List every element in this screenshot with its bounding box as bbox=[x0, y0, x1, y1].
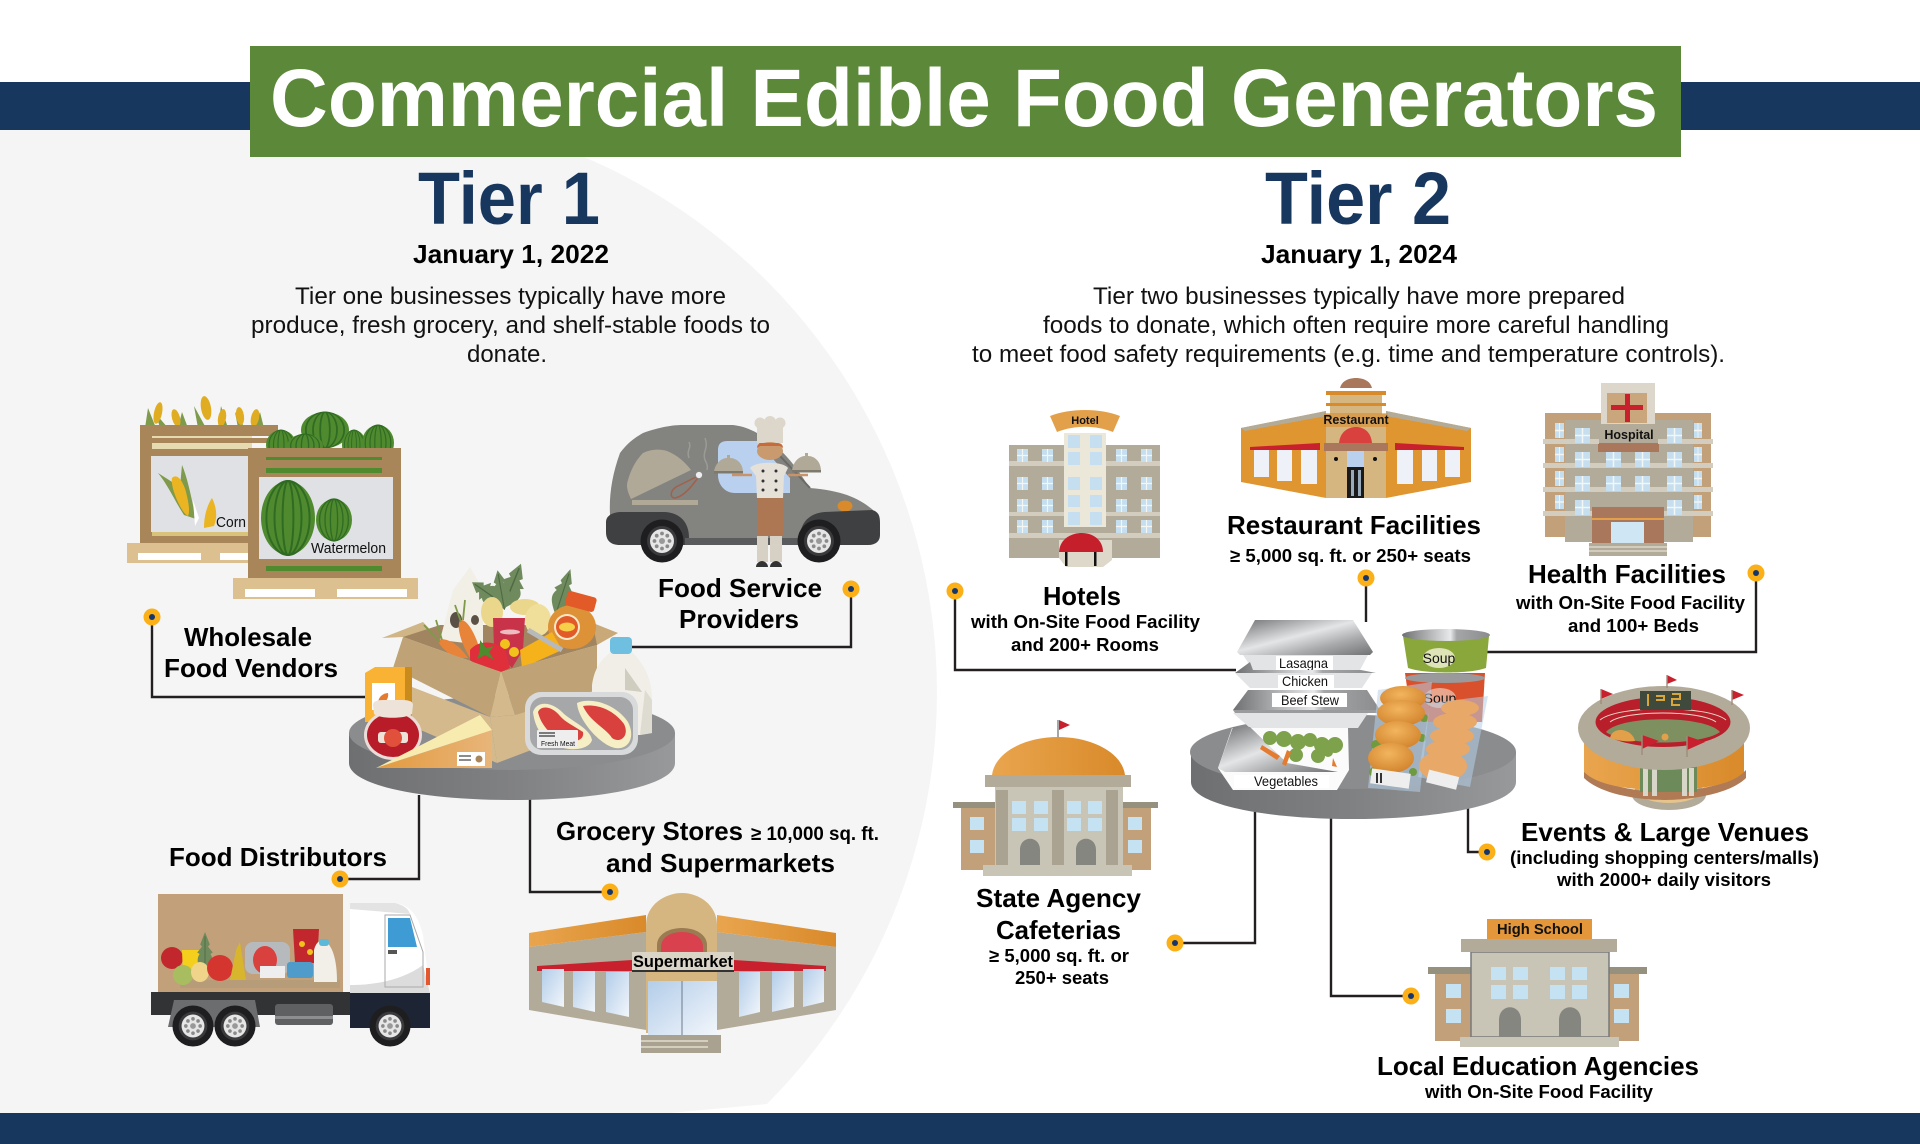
label: state agency cafeterias: Cafeterias bbox=[996, 915, 1121, 945]
icon: supermarket building: Supermarket bbox=[633, 952, 733, 971]
connector lines tier 2 bbox=[955, 573, 1756, 996]
icon: wholesale crates of corn and watermelon bbox=[127, 395, 418, 599]
icon: food service van with chef bbox=[606, 416, 880, 567]
stacked clamshell containers: Vegetables bbox=[1254, 773, 1318, 789]
icon: wholesale crates of corn and watermelon: Watermelon bbox=[311, 541, 386, 557]
label: local education agencies bbox=[1377, 1051, 1699, 1102]
tier 2 description: to meet food safety requirements (e.g. time and temperature controls). bbox=[972, 341, 1725, 368]
icon: hospital: Hospital bbox=[1604, 428, 1654, 442]
tier 2 description bbox=[972, 283, 1725, 368]
label: grocery stores and supermarkets: Grocery Stores bbox=[556, 816, 743, 846]
burgers bbox=[1368, 682, 1432, 792]
title banner: Commercial Edible Food Generators bbox=[270, 53, 1658, 144]
icon: hotel: Hotel bbox=[1071, 415, 1099, 427]
label: health facilities bbox=[1515, 559, 1746, 636]
label: grocery stores and supermarkets: and Supermarkets bbox=[606, 848, 835, 878]
tier 1 description: donate. bbox=[467, 341, 547, 368]
label: events and large venues: Events & Large Venues bbox=[1521, 817, 1809, 847]
stacked clamshell containers: Lasagna bbox=[1279, 655, 1328, 671]
stacked clamshell containers bbox=[1218, 620, 1380, 790]
tier 2 date: January 1, 2024 bbox=[1261, 239, 1458, 269]
tier 1 date: January 1, 2022 bbox=[413, 239, 609, 269]
label: state agency cafeterias bbox=[976, 883, 1142, 988]
label: food service providers: Providers bbox=[679, 604, 799, 634]
bottom navy band bbox=[0, 1113, 1920, 1144]
label: wholesale food vendors bbox=[164, 622, 338, 683]
label: restaurant facilities: Restaurant Facilities bbox=[1227, 510, 1481, 540]
icon: wholesale crates of corn and watermelon: Corn bbox=[216, 515, 246, 531]
soup cups bbox=[1402, 629, 1490, 722]
icon: restaurant bbox=[1241, 378, 1471, 498]
icon: food distributor truck bbox=[151, 894, 430, 1047]
soup cups: Soup bbox=[1423, 650, 1456, 666]
label: hotels bbox=[970, 581, 1201, 655]
label: food distributors: Food Distributors bbox=[169, 842, 387, 872]
label: hotels: Hotels bbox=[1043, 581, 1121, 611]
label: health facilities: Health Facilities bbox=[1528, 559, 1726, 589]
icon: stadium bbox=[1578, 675, 1750, 810]
icon: tier 1 grey platform with food box bbox=[349, 559, 675, 800]
label: local education agencies: with On-Site Food Facility bbox=[1424, 1081, 1654, 1102]
heading: tier 1: Tier 1 bbox=[418, 157, 600, 240]
label: food service providers bbox=[658, 573, 822, 634]
icon: high school building: High School bbox=[1497, 921, 1583, 938]
label: grocery stores and supermarkets bbox=[556, 816, 879, 878]
meat tray: Fresh Meat bbox=[541, 739, 576, 748]
orange juice carton bbox=[365, 667, 412, 722]
label: hotels: with On-Site Food Facility bbox=[970, 611, 1201, 632]
tier 1 description: produce, fresh grocery, and shelf-stable foods to bbox=[251, 312, 770, 339]
icon: tier 2 grey platform with prepared food bbox=[1190, 620, 1516, 819]
label: events and large venues: (including shopping centers/malls) bbox=[1510, 847, 1819, 868]
label: events and large venues: with 2000+ daily visitors bbox=[1556, 869, 1771, 890]
label: restaurant facilities bbox=[1227, 510, 1481, 566]
soup cups: Soup bbox=[1424, 690, 1457, 706]
label: state agency cafeterias: 250+ seats bbox=[1015, 967, 1109, 988]
tier 1 description: Tier one businesses typically have more bbox=[295, 283, 726, 310]
label: wholesale food vendors: Food Vendors bbox=[164, 653, 338, 683]
label: health facilities: with On-Site Food Facility bbox=[1515, 592, 1746, 613]
label: state agency cafeterias: ≥ 5,000 sq. ft. or bbox=[989, 945, 1129, 966]
meat tray bbox=[525, 692, 638, 755]
food box contents bbox=[424, 559, 597, 672]
connector end dots bbox=[144, 564, 1764, 1004]
tier 2 description: Tier two businesses typically have more prepared bbox=[1093, 283, 1625, 310]
label: restaurant facilities: ≥ 5,000 sq. ft. or 250+ seats bbox=[1230, 545, 1471, 566]
label: food service providers: Food Service bbox=[658, 573, 822, 603]
top navy band bbox=[0, 82, 1920, 130]
tier 2 description: foods to donate, which often require more careful handling bbox=[1043, 312, 1669, 339]
icon: restaurant: Restaurant bbox=[1323, 413, 1389, 427]
background: grey circle panel behind tier 1 bbox=[0, 130, 937, 1113]
tier 1 description bbox=[251, 283, 770, 368]
icon: high school building bbox=[1428, 919, 1647, 1047]
pastries bbox=[1418, 696, 1488, 790]
label: wholesale food vendors: Wholesale bbox=[184, 622, 312, 652]
icon: hospital bbox=[1543, 383, 1713, 556]
stacked clamshell containers: Beef Stew bbox=[1281, 692, 1340, 708]
icon: state agency capitol building bbox=[953, 720, 1158, 876]
label: hotels: and 200+ Rooms bbox=[1011, 634, 1159, 655]
icon: hotel bbox=[1009, 410, 1160, 567]
cheese bbox=[376, 715, 492, 768]
stacked clamshell containers: Chicken bbox=[1282, 673, 1328, 689]
label: local education agencies: Local Education Agencies bbox=[1377, 1051, 1699, 1081]
connector lines tier 1 bbox=[152, 589, 851, 892]
label: events and large venues bbox=[1510, 817, 1819, 890]
heading: tier 2: Tier 2 bbox=[1265, 157, 1451, 240]
icon: supermarket building bbox=[529, 893, 836, 1053]
milk jug bbox=[592, 637, 652, 735]
label: grocery stores and supermarkets: ≥ 10,000 sq. ft. bbox=[751, 824, 879, 845]
label: state agency cafeterias: State Agency bbox=[976, 883, 1142, 913]
chef bbox=[714, 416, 821, 567]
label: health facilities: and 100+ Beds bbox=[1568, 615, 1699, 636]
jam jar bbox=[364, 700, 422, 760]
